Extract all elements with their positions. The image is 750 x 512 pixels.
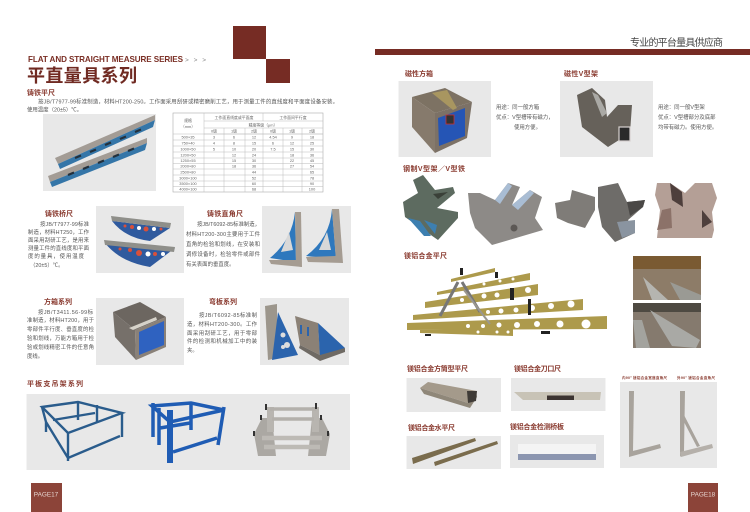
section: magnetic V-block <box>560 69 717 157</box>
precision table: 9 <box>291 134 293 140</box>
heading: 弯板系列 <box>209 297 237 306</box>
section: cast iron straight ruler <box>27 88 338 192</box>
description: 使用方便。 <box>514 123 541 131</box>
precision table: （mm） <box>181 124 195 129</box>
product: level ruler <box>406 423 501 469</box>
page number 18: PAGE18 <box>691 492 716 498</box>
precision table: 1000×50 <box>180 146 196 152</box>
precision table: 4000×100 <box>179 186 198 192</box>
description: 件的检测和机械加工中的装 <box>187 337 258 345</box>
title arrows: > > > <box>185 57 206 64</box>
description: 测量工件的直线度和平面 <box>28 244 90 252</box>
precision table: 2500×80 <box>180 170 196 174</box>
precision table: 52 <box>252 176 256 180</box>
precision table: 45 <box>310 158 314 163</box>
description <box>28 220 90 269</box>
heading: 铸铁桥尺 <box>45 209 73 218</box>
precision table: 2级 <box>309 128 315 134</box>
precision table: 30 <box>252 158 257 163</box>
precision table <box>173 113 323 192</box>
heading: 磁性方箱 <box>405 69 433 78</box>
precision table: 20 <box>252 146 257 152</box>
heading: 磁性V型架 <box>564 69 598 78</box>
description: 准制造，材料HT200，用于 <box>27 316 95 324</box>
precision table: 规格 <box>184 118 192 123</box>
section: steel V-blocks <box>403 164 717 245</box>
description: 造，材料HT200-300。工作 <box>187 320 258 328</box>
precision table: 36 <box>252 164 256 168</box>
photo <box>406 378 501 412</box>
heading: 镁铝合金方筒型平尺 <box>407 364 468 373</box>
title: English series name: FLAT AND STRAIGHT MEASURE SERIES <box>28 55 184 64</box>
description: 按JB/T3411.56-99标 <box>38 308 94 316</box>
heading: 镁铝合金平尺 <box>404 251 447 260</box>
description: 用途：同一般方箱 <box>496 103 540 111</box>
product photo: gold rulers <box>407 268 607 336</box>
description: 按JB/T6092-85标准制 <box>199 311 257 319</box>
product photo: box <box>96 298 184 365</box>
product photo: two bridge rulers <box>96 206 184 273</box>
product photo: magnetic V-block <box>560 81 653 157</box>
product: inspection bridge plate <box>510 422 604 468</box>
precision table: 10 <box>232 146 237 152</box>
description <box>27 308 95 360</box>
description: 按JB/T7977-99标准制造，材料HT200-250。工作面采用刮研或精密磨削工艺，用于测量工件的直线度和平面度设备安装。 <box>38 98 338 106</box>
description <box>27 98 338 114</box>
description: 面采用刮研工艺，是用来 <box>28 236 90 244</box>
precision table: 1200×50 <box>180 152 196 158</box>
precision table: 65 <box>310 170 314 174</box>
description: 有关表面的垂直度。 <box>186 260 235 268</box>
precision table: 6 <box>233 134 235 140</box>
small heading: outer 90: 外90° 镁铝合金直角尺 <box>677 375 715 380</box>
description: 度线。 <box>27 352 43 360</box>
precision table: 1250×55 <box>180 158 196 163</box>
product photo: two right-angle squares <box>262 206 351 273</box>
description: 夹。 <box>187 346 198 354</box>
heading: 平板支吊架系列 <box>27 379 83 388</box>
description: 度的量具，使用温度 <box>28 252 85 260</box>
description: 优点：V型槽带有磁力， <box>496 113 554 121</box>
precision table: 15 <box>290 146 294 152</box>
heading: 镁铝合金水平尺 <box>408 423 455 432</box>
precision table: 18 <box>310 134 314 140</box>
description: 优点：V型槽部分及底部 <box>658 113 716 121</box>
precision table: 3000×100 <box>179 176 198 180</box>
section: magnetic box <box>398 69 554 157</box>
precision table: 500×35 <box>181 134 195 140</box>
product photo: two straight rulers <box>43 114 156 191</box>
section: box series <box>27 297 184 365</box>
workshop photo 2 <box>633 303 701 348</box>
precision table: 12 <box>252 134 256 140</box>
precision table: 30 <box>310 146 315 152</box>
product: square tube ruler <box>406 364 501 412</box>
page number 17 <box>31 483 62 512</box>
precision table: 1级 <box>289 128 295 134</box>
photo <box>620 382 717 468</box>
decorative squares: top of left page <box>233 26 290 83</box>
precision table: 0级 <box>270 128 276 134</box>
description: 验和划线，万能方箱用于检 <box>27 334 95 342</box>
description: 用途：同一般V型架 <box>658 103 705 111</box>
precision table: 27 <box>290 164 294 168</box>
section: magnesium-aluminium straight ruler <box>404 251 701 348</box>
precision table: 25 <box>310 140 314 146</box>
section: cast iron bridge ruler <box>28 206 184 273</box>
title: Chinese heading: 平直量具系列 <box>27 65 137 86</box>
precision table: 1级 <box>231 128 237 134</box>
precision table: 3 <box>213 134 215 140</box>
page number 17: PAGE17 <box>34 492 59 498</box>
product photos: four V-blocks <box>403 175 717 245</box>
description: 零部件平行度、垂直度的检 <box>27 325 95 333</box>
precision table: 18 <box>290 152 294 158</box>
precision table: 4 <box>213 140 216 146</box>
precision table: 2000×80 <box>180 164 196 168</box>
precision table: 精度等级（μm） <box>249 122 277 128</box>
description <box>658 103 717 131</box>
description: 均带有磁力。使用方便。 <box>658 123 717 131</box>
precision table: 68 <box>252 186 256 192</box>
heading: 方箱系列 <box>44 297 72 306</box>
precision table: 6 <box>272 140 274 146</box>
precision table: 工作面间平行度 <box>279 115 307 120</box>
description: 制造，材料HT250，工作 <box>28 228 90 236</box>
precision table: 0级 <box>211 128 217 134</box>
precision table: 750×40 <box>181 140 195 146</box>
small heading: inner 90: 内90° 镁铝合金宽座直角尺 <box>622 375 667 380</box>
precision table: 90 <box>310 181 315 186</box>
precision table: 7.5 <box>270 146 276 152</box>
precision table: 54 <box>310 164 315 168</box>
precision table: 5 <box>213 146 215 152</box>
precision table: 100 <box>309 186 316 192</box>
product: inner and outer right-angle rulers <box>620 375 717 468</box>
precision table: 4.54 <box>269 134 278 140</box>
description: 材料HT200-300主要用于工件 <box>186 230 261 238</box>
slogan: 专业的平台量具供应商 <box>630 36 723 49</box>
photo <box>510 435 604 468</box>
description <box>186 220 261 268</box>
description: 验或划线精密工件的任意角 <box>27 343 94 351</box>
description <box>496 103 554 131</box>
description: 使用温度（20±5）℃。 <box>27 106 82 114</box>
description: 面采用刮研工艺，用于零部 <box>187 329 258 337</box>
precision table: 36 <box>310 152 314 158</box>
heading: 镁铝合金检测桥板 <box>510 422 564 431</box>
precision table: 15 <box>232 158 236 163</box>
header bar on right page <box>375 36 750 55</box>
product photo: magnetic box <box>398 81 491 157</box>
description: 按JB/T7977-99标准 <box>40 220 90 228</box>
precision table: 12 <box>290 140 294 146</box>
product photo: angle plates <box>260 298 349 365</box>
precision table: 18 <box>232 164 236 168</box>
precision table: 工作面直线度或平面度 <box>215 115 254 120</box>
description <box>187 311 258 354</box>
heading: 铸铁平尺 <box>27 88 55 97</box>
photo <box>406 436 501 469</box>
precision table: 8 <box>233 140 235 146</box>
heading: 钢制V型架／V型铁 <box>403 164 465 173</box>
precision table: 2级 <box>251 128 257 134</box>
product panel: three stands <box>26 394 350 470</box>
heading: 铸铁直角尺 <box>207 209 243 218</box>
description: （20±5）℃。 <box>30 262 64 269</box>
stand: bright blue <box>152 402 224 463</box>
photo <box>511 378 606 411</box>
precision table: 3500×100 <box>179 181 198 186</box>
page number 18 <box>688 483 718 512</box>
precision table: 24 <box>252 152 257 158</box>
description: 按JB/T6092-85标准制造， <box>197 220 260 228</box>
section: angle plate series <box>187 297 349 365</box>
precision table: 22 <box>290 158 294 163</box>
precision table: 44 <box>252 170 257 174</box>
precision table: 15 <box>252 140 256 146</box>
heading: 镁铝合金刀口尺 <box>514 364 561 373</box>
description: 直角的检验和划线，在安装和 <box>186 240 260 248</box>
description: 调修设备时，检验零件或部件 <box>186 250 261 258</box>
stand: dark blue <box>42 402 122 461</box>
precision table: 78 <box>310 176 314 180</box>
section: cast iron right-angle ruler <box>186 206 351 273</box>
section: surface plate stands <box>26 379 350 470</box>
precision table: 60 <box>252 181 257 186</box>
stand: gray <box>254 403 330 456</box>
workshop photo 1 <box>633 256 701 300</box>
product: knife-edge ruler <box>511 364 606 411</box>
precision table: 12 <box>232 152 236 158</box>
